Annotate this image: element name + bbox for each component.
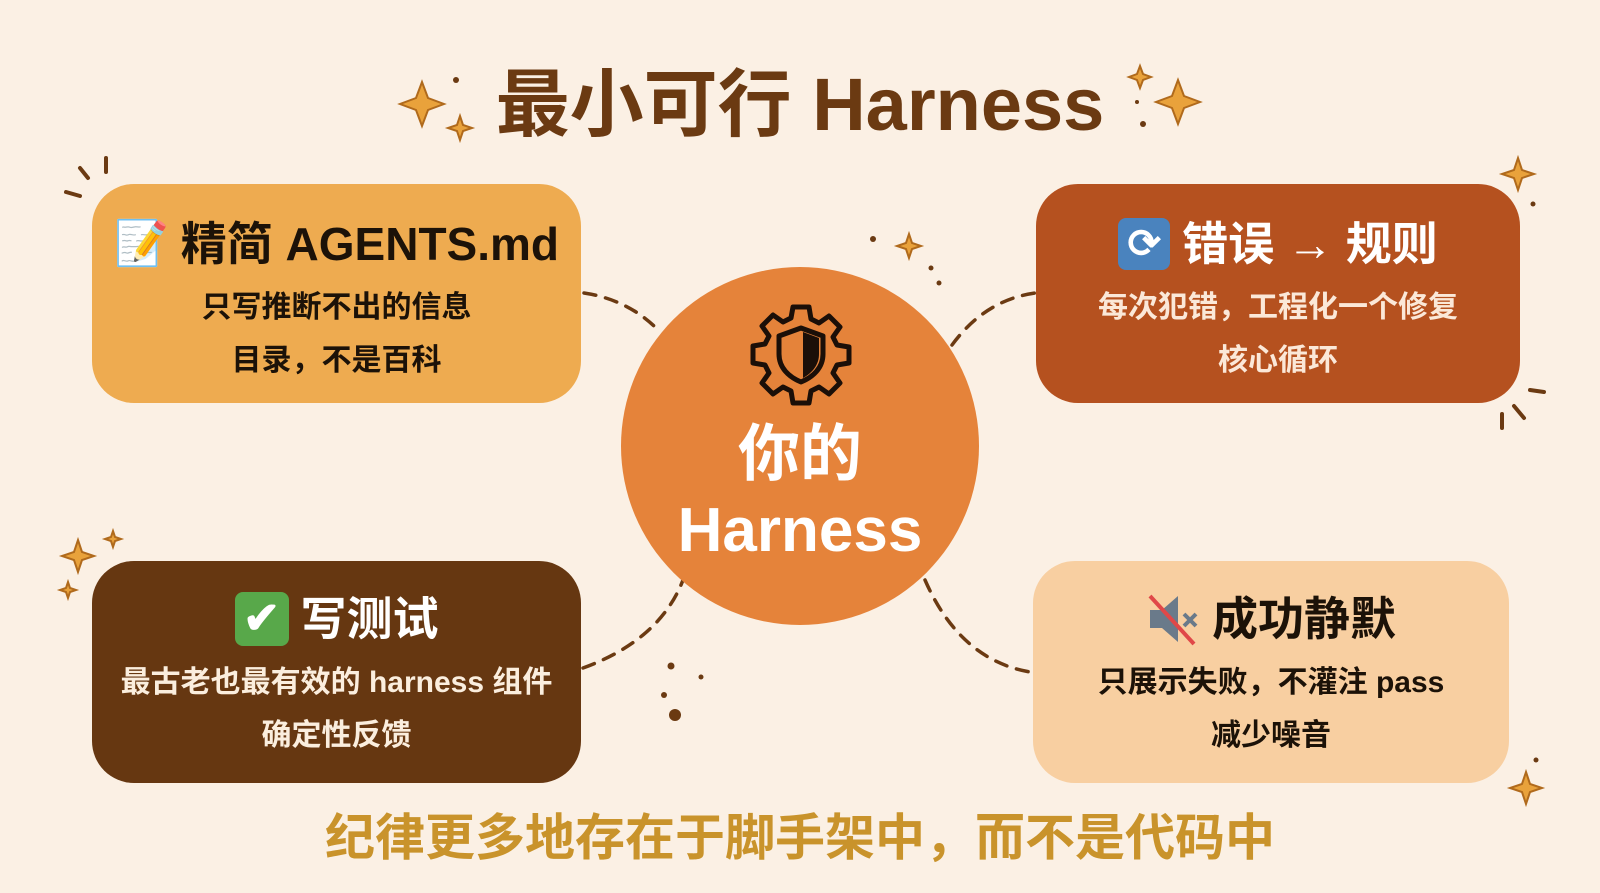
text: 错误→规则: 核心循环 xyxy=(1218,344,1338,377)
text: 写测试 xyxy=(121,666,552,752)
text: 你的 Harness: 你的 xyxy=(738,420,862,489)
heading: AGENTS.md: 📝 xyxy=(114,219,169,268)
panel: 成功静默 xyxy=(1033,561,1509,783)
text: 写测试: 确定性反馈 xyxy=(262,719,412,752)
icon: gear shield xyxy=(750,304,852,406)
icon: muted speaker xyxy=(1148,594,1198,646)
heading: 成功静默: 成功静默 xyxy=(1212,593,1396,645)
text: 你的 Harness: Harness xyxy=(678,496,922,565)
heading: 写测试: ✔ xyxy=(243,594,280,643)
heading: AGENTS.md: 精简 AGENTS.md xyxy=(181,218,559,270)
text: AGENTS.md: 只写推断不出的信息 xyxy=(202,291,472,324)
text: 你的 Harness xyxy=(678,420,922,565)
heading: 错误→规则: 错误 → 规则 xyxy=(1182,218,1438,270)
text: AGENTS.md xyxy=(202,290,472,377)
text: 成功静默: 只展示失败，不灌注 pass xyxy=(1098,666,1444,699)
heading: 错误→规则: ⟳ xyxy=(1127,222,1161,266)
panel: 写测试 xyxy=(92,561,581,783)
footer tagline: 纪律更多地存在于脚手架中，而不是代码中 xyxy=(325,810,1275,866)
panel: 错误→规则 xyxy=(1036,184,1520,403)
text: 成功静默: 减少噪音 xyxy=(1211,719,1331,752)
text: 错误→规则: 每次犯错，工程化一个修复 xyxy=(1098,291,1458,324)
panel: AGENTS.md xyxy=(92,184,581,403)
text: 错误→规则 xyxy=(1098,291,1458,377)
title: 最小可行 Harness xyxy=(496,63,1104,146)
heading: 写测试: 写测试 xyxy=(300,593,438,645)
heading: 写测试 xyxy=(235,592,438,646)
text: AGENTS.md: 目录，不是百科 xyxy=(232,344,442,377)
center circle xyxy=(621,267,979,625)
text: 写测试: 最古老也最有效的 harness 组件 xyxy=(121,666,552,699)
text: 成功静默 xyxy=(1098,666,1444,752)
